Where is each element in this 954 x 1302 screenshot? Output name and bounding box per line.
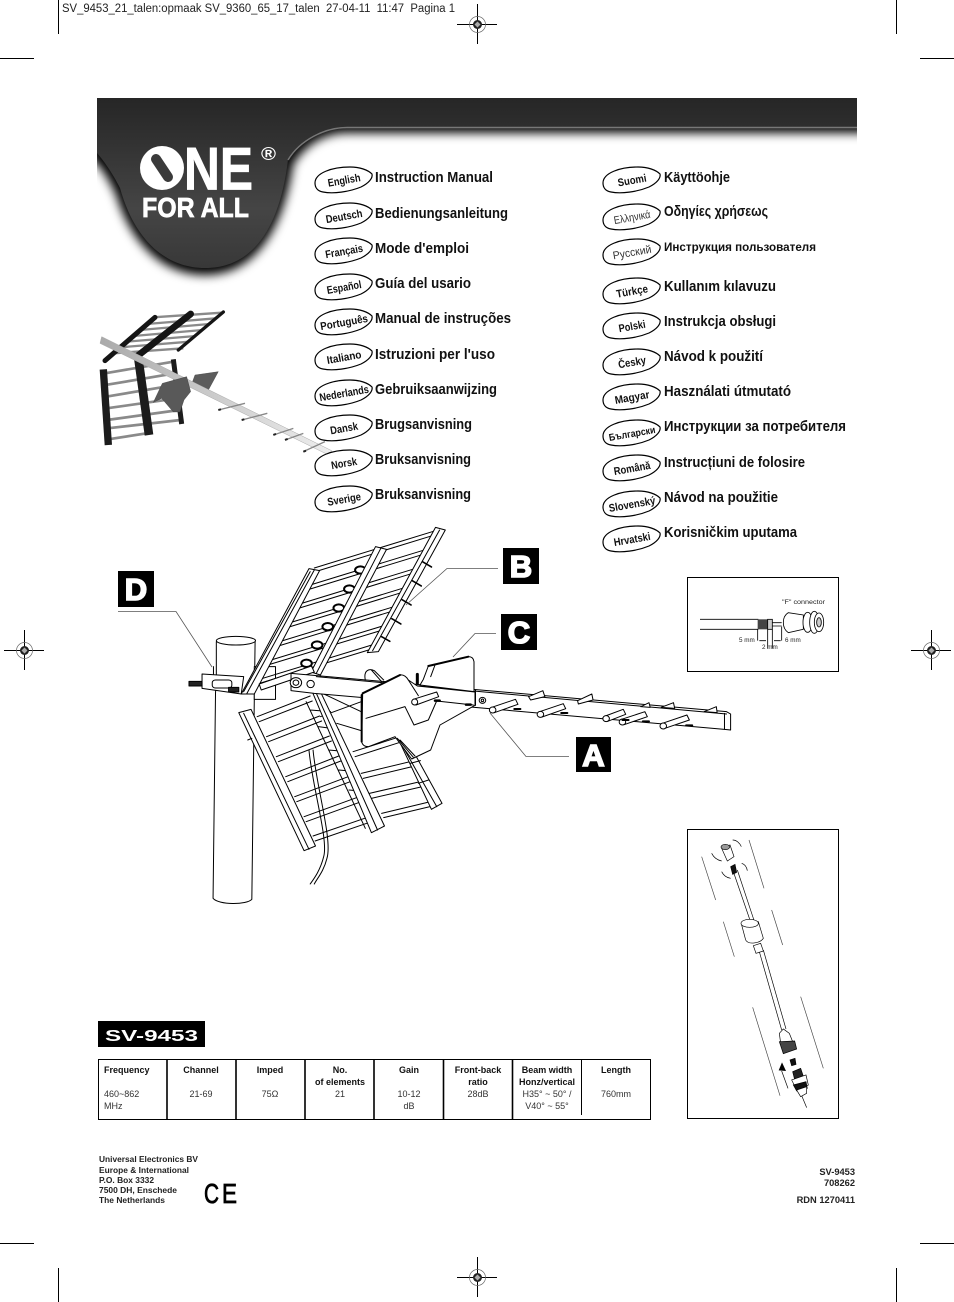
language: Norsk: Norsk [330,456,359,472]
lower reflector [239,692,442,851]
language: Română: Română [613,460,652,478]
specification table: 760mm [601,1089,631,1099]
director elements [479,691,717,729]
specification table: 75Ω [262,1089,279,1099]
language: Français [315,238,469,264]
specification table: Frequency [104,1065,150,1075]
specification table: H35° ~ 50° / [523,1089,572,1099]
specification table: Channel [183,1065,219,1075]
inset: F connector: 6 mm [785,637,801,644]
lower reflector rungs [105,362,181,439]
label A [490,713,611,773]
logo: ONE FOR ALL: FOR ALL [142,192,249,223]
language: Greek: Οδηγίες χρήσεως [664,203,768,220]
language: Português: Português [319,313,369,333]
clamp bracket [189,667,244,694]
logo: ONE FOR ALL: O [140,136,184,202]
director elements [218,403,325,452]
connector drawing [700,611,824,649]
registration mark top [457,4,497,44]
product codes: RDN 1270411 [797,1195,855,1205]
guide lines [702,840,823,1096]
specification table [98,1059,650,1120]
language: English: Instruction Manual [375,169,493,186]
language: Suomi: Suomi [617,173,647,189]
language: Español: Español [326,279,362,297]
boom [100,337,332,455]
language: Deutsch: Bedienungsanleitung [375,205,508,222]
language: Deutsch [315,203,508,229]
language: Română: Instrucțiuni de folosire [664,454,805,471]
specification table: of elements [315,1077,365,1087]
label B [406,548,539,605]
language: Magyar [603,383,791,410]
assembled antenna line drawing [189,527,731,903]
language list right column [603,167,846,552]
specification table: ratio [468,1077,488,1087]
inset: F connector: 2 mm [762,644,778,651]
language: Français: Français [324,243,364,261]
cable [309,750,328,884]
company address: Europe & International [99,1166,189,1175]
language: English [315,167,493,193]
specification table: 10-12 [397,1089,421,1099]
language: Sverige: Bruksanvisning [375,486,471,503]
language: Polski: Polski [618,319,647,335]
language: Español: Guía del usario [375,275,471,292]
3D antenna product image [100,312,332,455]
language: Italiano [315,344,495,370]
language: Česky [603,348,764,375]
product codes: 708262 [824,1178,855,1188]
language: Nederlands [315,380,497,406]
rear bracket [254,667,276,699]
language: Polski: Instrukcja obsługi [664,313,776,330]
registration mark right [911,630,951,670]
language: English: English [327,172,362,190]
print slug line: SV_9453_21_talen:opmaak SV_9360_65_17_talen 27-04-11 11:47 Pagina 1 [62,3,455,15]
language: Suomi: Käyttöohje [664,169,730,186]
language: Italiano: Italiano [326,349,363,367]
mounting pole [213,636,256,903]
language: Russian [603,239,816,265]
specification table: Front-back [455,1065,502,1075]
language: Russian: Инструкция пользователя [664,240,816,254]
language: Slovenský: Slovenský [608,495,657,515]
language: Türkçe: Türkçe [615,283,649,301]
rear dipole plate [192,372,218,392]
dipole plates [362,657,475,759]
product codes: SV-9453 [819,1167,855,1177]
label C [453,614,537,657]
inset: F connector [688,578,838,672]
language: Norsk [315,450,471,476]
main boom [290,670,731,730]
model badge: SV-9453 [105,1028,198,1045]
inset: cable assembly [688,830,838,1118]
language: Hrvatski: Korisničkim uputama [664,524,798,541]
language: Español [315,274,471,300]
label B: B [510,549,532,584]
logo: ONE FOR ALL [140,136,276,223]
language: Slovenský [603,489,778,517]
language: Dansk [315,415,472,441]
label D [118,571,212,667]
language: Português [315,309,511,335]
lower connector [779,1029,793,1043]
language: Magyar: Magyar [614,389,651,407]
top nut [722,845,734,861]
logo: ONE FOR ALL: ® [261,144,276,164]
specification table: MHz [104,1101,123,1111]
specification table: No. [333,1065,347,1075]
language: Română [603,454,805,481]
language: Deutsch: Deutsch [325,208,364,226]
language: Bulgarian: Инструкции за потребителя [664,418,846,435]
company address: P.O. Box 3332 [99,1176,155,1185]
inset: F connector: "F" connector [782,599,825,606]
specification table: V40° ~ 55° [525,1101,569,1111]
language: Italiano: Istruzioni per l'uso [375,346,495,363]
cable [733,870,807,1108]
language: Norsk: Bruksanvisning [375,451,471,468]
arrow [779,1062,786,1071]
specification table: Length [601,1065,631,1075]
label D: D [125,572,147,607]
language: Česky: Česky [617,354,648,371]
language: Türkçe: Kullanım kılavuzu [664,278,776,295]
specification table: 21-69 [189,1089,213,1099]
language: Português: Manual de instruções [375,310,511,327]
language: Dansk: Brugsanvisning [375,416,472,433]
specification table: Honz/vertical [519,1077,575,1087]
label C: C [508,615,530,650]
logo: ONE FOR ALL: NE [184,136,253,202]
specification table: Beam width [522,1065,572,1075]
product codes [797,1167,855,1205]
language: Česky: Návod k použití [664,348,764,365]
language: Slovenský: Návod na použitie [664,489,778,506]
company address: 7500 DH, Enschede [99,1186,178,1195]
language: Hrvatski [603,524,798,552]
upper reflector [241,527,445,694]
CE mark: C [204,1178,219,1209]
front dipole plate [153,377,191,412]
specification table: 21 [335,1089,345,1099]
language: Sverige: Sverige [326,491,362,509]
language: Nederlands: Nederlands [319,384,370,404]
registration mark left [4,630,44,670]
specification table: Gain [399,1065,419,1075]
language: Français: Mode d'emploi [375,240,469,257]
language: Bulgarian [603,418,846,446]
language: Greek: Ελληνικά [613,209,652,227]
inset: F connector: 5 mm [739,637,755,644]
specification table: dB [403,1101,415,1111]
CE mark [204,1178,237,1209]
language: Bulgarian: Български [608,425,656,444]
language: Greek [603,203,768,230]
specification table: 460~862 [104,1089,139,1099]
company address [99,1155,199,1205]
language: Nederlands: Gebruiksaanwijzing [375,381,497,398]
model badge [98,1021,205,1047]
CE mark: E [222,1178,237,1209]
company address: Universal Electronics BV [99,1155,199,1164]
company address: The Netherlands [99,1196,166,1205]
language: Polski [603,313,776,339]
specification table: Imped [257,1065,283,1075]
language: Suomi [603,167,730,193]
front plate and boom section [362,675,475,759]
language: Sverige [315,486,471,512]
language: Dansk: Dansk [329,421,360,437]
rear plate [417,657,474,692]
language: Hrvatski: Hrvatski [613,531,651,549]
label A: A [582,738,605,773]
middle sleeve [742,922,763,943]
registration mark bottom [457,1257,497,1297]
language: Magyar: Használati útmutató [664,383,791,400]
upper reflector rungs [113,313,222,353]
language list left column [315,167,511,512]
language: Russian: Русский [612,244,652,262]
header band with logo [0,60,954,300]
language: Türkçe [603,278,776,304]
specification table: 28dB [467,1089,489,1099]
